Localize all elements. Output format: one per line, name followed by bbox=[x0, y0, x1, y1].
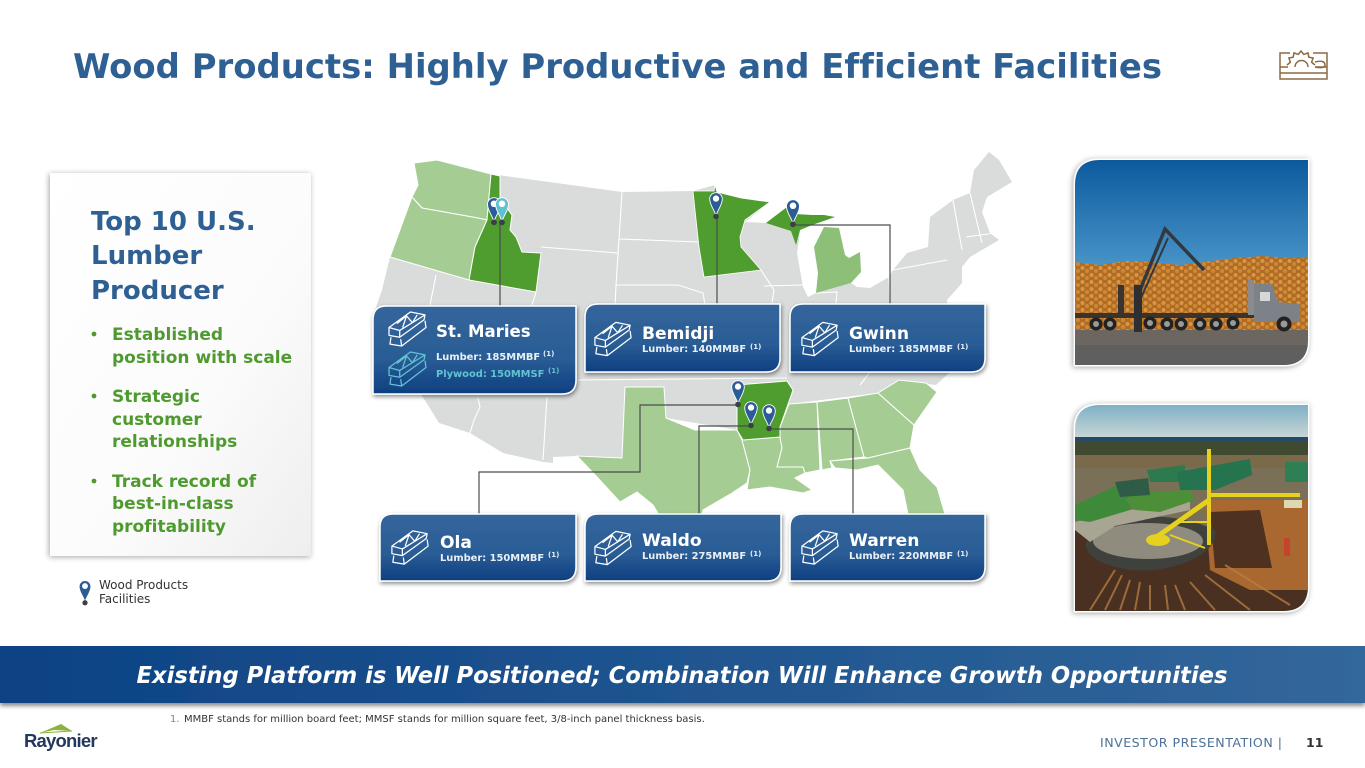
panel: Gwinn bbox=[790, 304, 985, 372]
panel: Warren bbox=[790, 514, 985, 581]
photo: log truck bbox=[1075, 160, 1308, 365]
panel: Bemidji: (1) bbox=[750, 343, 761, 351]
bullet list: Strategic bbox=[112, 387, 200, 407]
panel: Bemidji: Bemidji bbox=[642, 324, 714, 344]
title: Wood Products: Highly Productive and Efficient Facilities bbox=[73, 47, 1162, 86]
page number: 11 bbox=[1306, 735, 1323, 750]
state borders bbox=[430, 192, 995, 460]
panel: Ola: (1) bbox=[548, 551, 559, 559]
panel: Waldo: Lumber: 275MMBF bbox=[642, 551, 746, 562]
minnesota bbox=[693, 185, 770, 277]
southern states bbox=[577, 380, 945, 520]
panel: Warren: (1) bbox=[957, 550, 968, 558]
panel: St. Maries: (1) bbox=[548, 367, 559, 375]
logo: Rayonier: Rayonier bbox=[24, 730, 97, 751]
connector lines bbox=[479, 217, 890, 514]
map of United States bbox=[375, 152, 1012, 520]
panel: Gwinn: Gwinn bbox=[849, 324, 909, 344]
bullet list: profitability bbox=[112, 517, 226, 537]
panel: Ola bbox=[380, 514, 576, 581]
panel: Bemidji: Lumber: 140MMBF bbox=[642, 344, 746, 355]
heading: Top 10 U.S. bbox=[91, 207, 256, 237]
idaho bbox=[469, 174, 541, 292]
map pins bbox=[487, 193, 800, 431]
panel: St. Maries: St. Maries bbox=[436, 322, 531, 341]
bullet list: position with scale bbox=[112, 348, 292, 368]
bullet list: customer bbox=[112, 410, 202, 430]
panel: top 10 producer bbox=[50, 173, 311, 556]
arkansas bbox=[737, 381, 793, 440]
panel: Gwinn: (1) bbox=[957, 343, 968, 351]
legend: wood products facilities bbox=[79, 578, 188, 606]
legend: wood products facilities: Facilities bbox=[99, 592, 150, 606]
panel: St. Maries bbox=[373, 306, 576, 394]
panel: St. Maries: (1) bbox=[543, 350, 554, 358]
panel: Ola: Lumber: 150MMBF bbox=[440, 553, 544, 564]
footnote: 1. bbox=[170, 714, 180, 725]
bullet list: relationships bbox=[112, 432, 237, 452]
panel: Bemidji bbox=[585, 304, 780, 372]
icon: saw blade bbox=[1280, 51, 1327, 79]
panel: St. Maries: Plywood: 150MMSF bbox=[436, 369, 544, 380]
bullet list: Track record of bbox=[112, 472, 257, 492]
banner bbox=[0, 646, 1365, 703]
panel: Waldo bbox=[585, 514, 781, 581]
panel: Waldo: (1) bbox=[750, 550, 761, 558]
heading: Producer bbox=[91, 276, 224, 306]
bullet list: Established bbox=[112, 325, 223, 345]
panel: Gwinn: Lumber: 185MMBF bbox=[849, 344, 953, 355]
footer label: INVESTOR PRESENTATION | bbox=[1100, 735, 1282, 750]
panel: Ola: Ola bbox=[440, 533, 472, 553]
bullet list bbox=[92, 325, 292, 537]
michigan bbox=[766, 207, 835, 245]
panel: Warren: Lumber: 220MMBF bbox=[849, 551, 953, 562]
panel: St. Maries: Lumber: 185MMBF bbox=[436, 352, 540, 363]
footnote: MMBF stands for million board feet; MMSF stands for million square feet, 3/8-inch panel thickness basis. bbox=[184, 714, 705, 725]
bullet list: best-in-class bbox=[112, 494, 234, 514]
banner: Existing Platform is Well Positioned; Combination Will Enhance Growth Opportunities bbox=[137, 663, 1227, 689]
photo: mill aerial bbox=[1075, 405, 1308, 611]
washington and oregon bbox=[412, 160, 491, 220]
panel: Warren: Warren bbox=[849, 531, 919, 551]
legend: wood products facilities: Wood Products bbox=[99, 578, 188, 592]
panel: Waldo: Waldo bbox=[642, 531, 702, 551]
heading: Lumber bbox=[91, 241, 202, 271]
